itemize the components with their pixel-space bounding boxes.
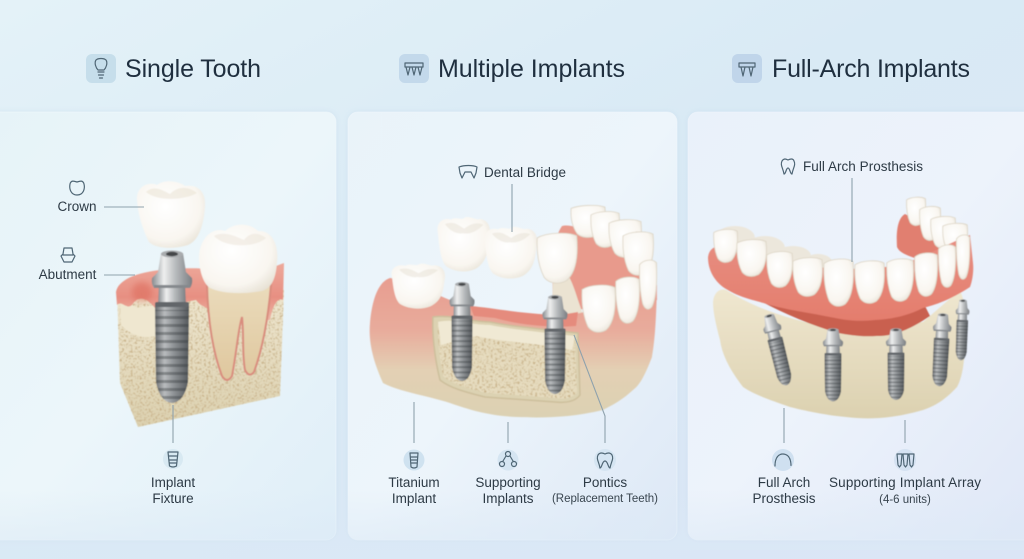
callout: full arch prosthesis (top)	[781, 159, 923, 262]
callout: dental bridge: Dental Bridge	[484, 165, 566, 180]
callout: full arch prosthesis (top): Full Arch Prosthesis	[803, 159, 923, 174]
icon: full arch badge	[732, 54, 762, 83]
rear gum	[897, 214, 945, 262]
callout: full arch prosthesis (bottom)	[752, 408, 816, 506]
icon: arch	[772, 449, 794, 471]
callout: pontics: Pontics	[583, 475, 627, 490]
callout: full arch prosthesis (bottom): Full Arch	[758, 475, 810, 490]
natural tooth root	[207, 285, 271, 380]
callout: supporting implants: Implants	[482, 491, 534, 506]
heading: full-arch implants: Full-Arch Implants	[772, 55, 970, 83]
denture gum underside	[755, 298, 930, 336]
icon: implant array	[894, 449, 916, 471]
bone block	[117, 290, 284, 427]
upper bone	[120, 302, 158, 337]
bone arch	[713, 290, 967, 418]
implant	[152, 250, 192, 403]
icon: tooth	[781, 159, 795, 174]
callout: supporting implants: Supporting	[475, 475, 541, 490]
callout: implant fixture: Fixture	[152, 491, 194, 506]
callout: pontics	[552, 335, 658, 505]
callout: supporting implant array	[829, 420, 981, 506]
gum ridge	[470, 306, 578, 327]
callout: supporting implant array: Supporting Implant Array	[829, 475, 981, 490]
heading: multiple implants: Multiple Implants	[438, 55, 625, 83]
icon: tooth	[594, 449, 616, 471]
callout: full arch prosthesis (bottom): Prosthesis	[752, 491, 816, 506]
gum	[116, 263, 284, 325]
jaw	[370, 278, 657, 417]
implants	[449, 282, 475, 381]
icon: abutment	[61, 248, 75, 262]
rear gum	[553, 225, 657, 310]
callout: titanium implant	[388, 402, 440, 506]
panel: single tooth	[0, 112, 336, 540]
implants	[954, 299, 970, 361]
heading: single tooth: Single Tooth	[125, 55, 261, 83]
callout: abutment	[39, 248, 135, 282]
callout: titanium implant: Implant	[392, 491, 436, 506]
panel: multiple implants	[348, 112, 677, 540]
panel: full-arch implants	[688, 112, 1024, 540]
icon: bridge badge	[399, 54, 429, 83]
illustration: bridge over two implants	[370, 205, 657, 417]
callout: pontics: (Replacement Teeth)	[552, 493, 658, 505]
illustration: full arch on implants	[708, 197, 973, 418]
callout: abutment: Abutment	[39, 267, 97, 282]
denture gum	[708, 235, 973, 321]
left molar	[392, 264, 445, 309]
cutaway bone window	[433, 316, 580, 402]
detached crown	[137, 181, 205, 248]
icon: bridge	[459, 166, 477, 178]
callout: titanium implant: Titanium	[388, 475, 440, 490]
icon: supporting implants	[498, 450, 518, 470]
natural tooth crown	[199, 225, 277, 293]
icon: titanium implant	[404, 450, 424, 470]
callout: supporting implant array: (4-6 units)	[879, 494, 931, 506]
icon: tooth implant badge	[86, 54, 116, 83]
callout: implant fixture: Implant	[151, 475, 195, 490]
bridge	[438, 217, 577, 283]
icon: implant fixture	[163, 449, 183, 469]
callout: supporting implants	[475, 422, 541, 506]
callout: crown	[57, 181, 144, 214]
rear teeth	[907, 197, 968, 254]
lingual teeth tops	[715, 226, 832, 270]
panel bottom fade	[0, 490, 1024, 550]
front teeth	[714, 229, 970, 306]
callout: crown: Crown	[57, 199, 97, 214]
rear teeth	[571, 205, 653, 275]
illustration: single implant beside natural tooth	[116, 181, 284, 427]
callout: dental bridge	[459, 165, 566, 232]
callout: implant fixture	[151, 405, 195, 506]
front teeth	[582, 260, 657, 332]
icon: crown	[70, 181, 84, 195]
gum shade near implant	[132, 282, 152, 302]
